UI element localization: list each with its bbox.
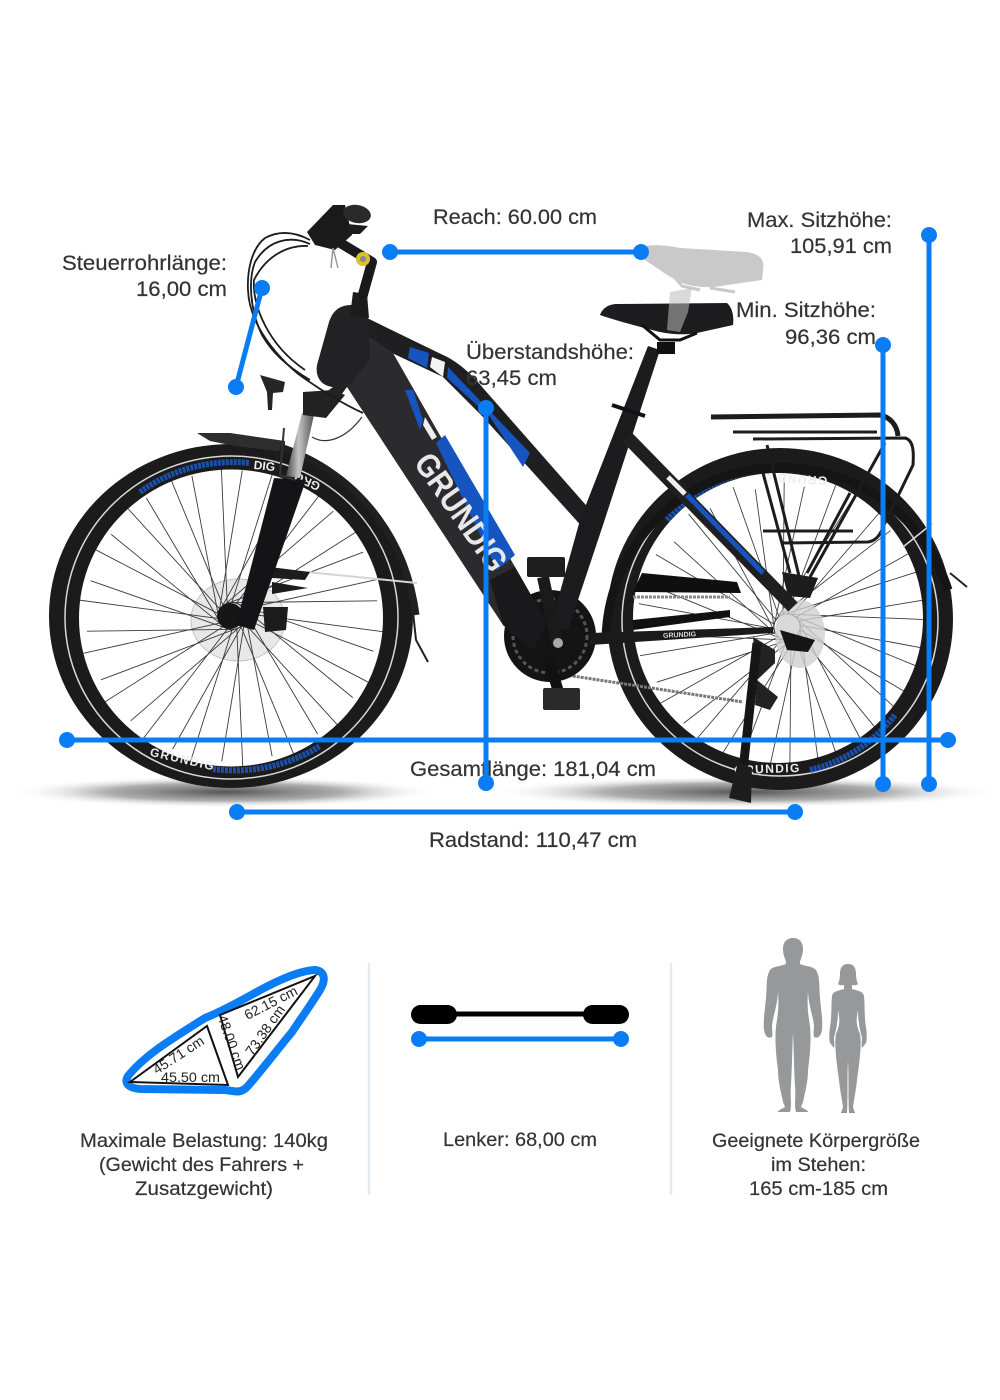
handlebar, stem and cables <box>248 203 372 413</box>
icon: frame triangles with dimensions: 48.00 cm <box>214 1012 249 1072</box>
dimension line: handlebar width <box>411 1031 629 1047</box>
drivetrain and chain <box>504 573 825 710</box>
text: suitable body height <box>712 1130 920 1200</box>
icon: handlebar <box>411 1005 629 1024</box>
label: Max. Sitzhöhe <box>747 209 892 258</box>
front wheel: DIG <box>253 458 276 474</box>
fork and headset <box>236 375 362 630</box>
icon: frame triangles with dimensions: 45.50 cm <box>161 1069 220 1085</box>
icon: frame triangles with dimensions <box>126 970 324 1092</box>
rear rack <box>711 415 913 598</box>
dimension line: total length <box>59 732 956 748</box>
label: Steuerrohrlänge: 16,00 cm <box>136 278 227 301</box>
front wheel: GRU <box>292 470 322 494</box>
frame: GRUNDIG <box>663 631 697 640</box>
text: suitable body height: 165 cm-185 cm <box>749 1178 888 1200</box>
e-bike illustration <box>0 203 1000 866</box>
label: Min. Sitzhöhe: Min. Sitzhöhe: <box>736 299 876 322</box>
dimension line: head tube <box>228 280 270 395</box>
icon: frame triangles with dimensions: 45.71 cm <box>150 1032 207 1077</box>
text: handlebar: Lenker: 68,00 cm <box>443 1129 597 1151</box>
dimension line: wheelbase <box>229 804 803 820</box>
rear wheel: GRUNDIG <box>762 470 828 488</box>
rear wheel <box>536 388 1000 866</box>
dimension line: max seat height <box>921 227 937 792</box>
text: maximum load <box>80 1130 328 1200</box>
label: Radstand: Radstand: 110,47 cm <box>429 829 637 852</box>
icon: frame triangles with dimensions: 62.15 cm <box>241 982 300 1023</box>
label: Steuerrohrlänge: Steuerrohrlänge: <box>62 252 227 275</box>
label: Reach: Reach: 60.00 cm <box>433 206 597 229</box>
icon: male and female silhouettes <box>764 938 867 1113</box>
label: Überstandshöhe: Überstandshöhe: <box>466 341 634 364</box>
text: suitable body height: im Stehen: <box>771 1154 866 1176</box>
label: Überstandshöhe: 63,45 cm <box>466 367 557 390</box>
frame <box>317 305 793 650</box>
dimension line: min seat height <box>875 337 891 792</box>
text: suitable body height: Geeignete Körpergröße <box>712 1130 920 1152</box>
crank and pedals <box>527 557 580 710</box>
front wheel: GRUNDIG <box>149 745 215 773</box>
label: Gesamtlänge: Gesamtlänge: 181,04 cm <box>410 758 656 781</box>
saddle <box>600 303 733 354</box>
label: Min. Sitzhöhe <box>736 299 876 349</box>
label: Max. Sitzhöhe: Max. Sitzhöhe: <box>747 209 892 232</box>
text: maximum load: Maximale Belastung: 140kg <box>80 1130 328 1152</box>
dimension line: standover <box>478 400 494 791</box>
kickstand <box>729 643 757 803</box>
label: Überstandshöhe <box>466 341 634 390</box>
label: Steuerrohrlänge <box>62 252 227 301</box>
ground shadow <box>10 776 1000 808</box>
saddle raised (ghost) <box>633 245 763 332</box>
front wheel <box>0 380 481 852</box>
icon: frame triangles with dimensions: 73.38 cm <box>242 1002 288 1058</box>
label: Min. Sitzhöhe: 96,36 cm <box>785 326 876 349</box>
label: Max. Sitzhöhe: 105,91 cm <box>790 235 892 258</box>
rear wheel: GRUNDIG <box>734 761 800 777</box>
text: maximum load: Zusatzgewicht) <box>135 1178 273 1200</box>
text: maximum load: (Gewicht des Fahrers + <box>99 1154 304 1176</box>
frame: GRUNDIG <box>407 446 516 578</box>
dimension line: reach <box>382 244 649 260</box>
